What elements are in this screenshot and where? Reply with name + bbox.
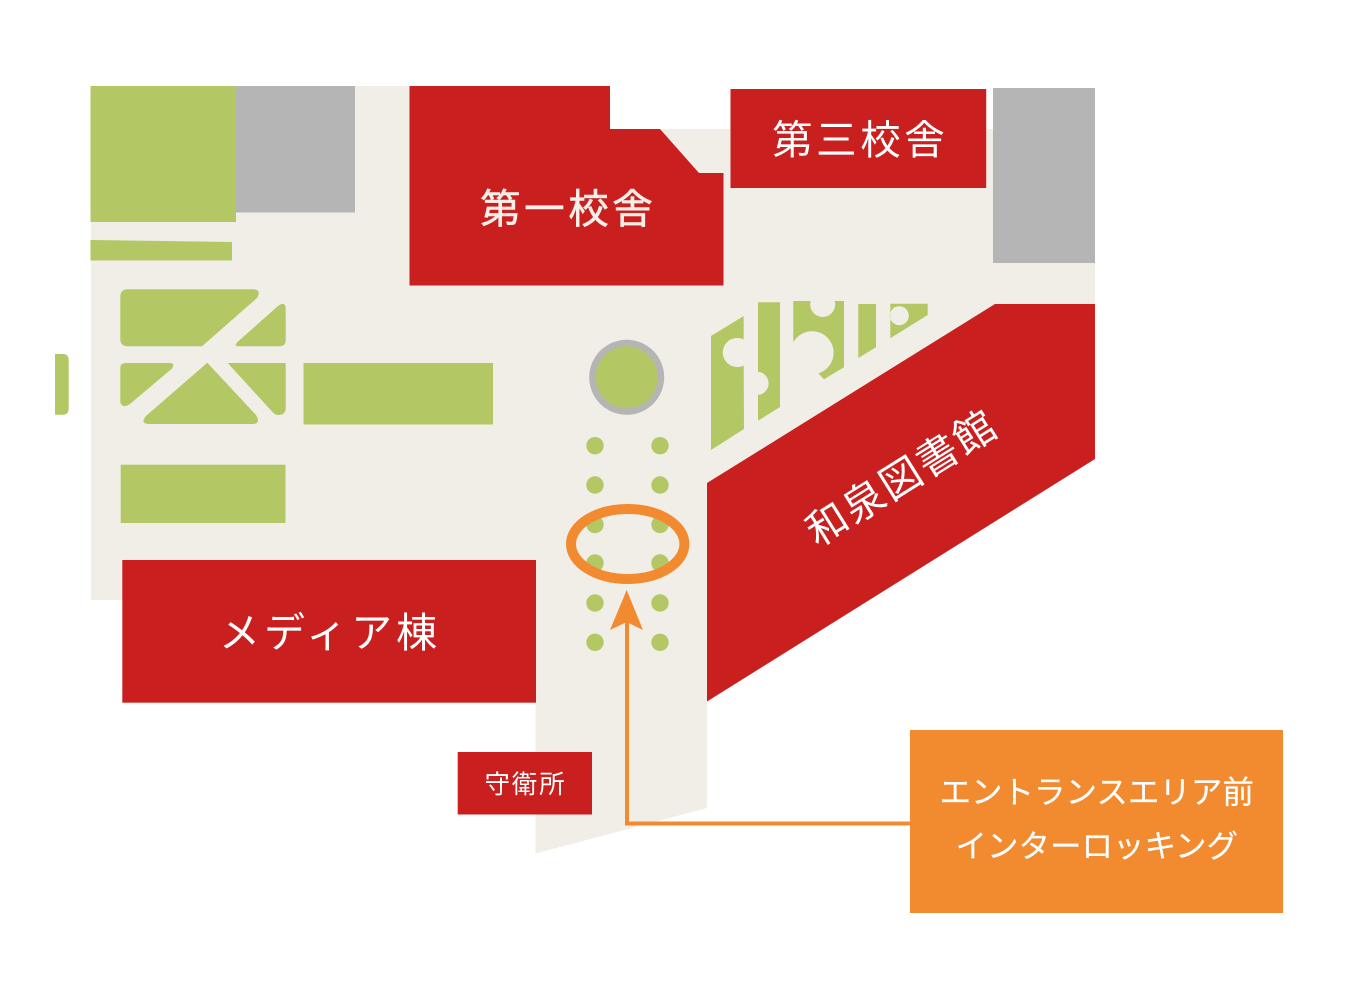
- building: 第一校舎: 第一校舎: [480, 186, 656, 232]
- building: 第三校舎: 第三校舎: [772, 117, 948, 163]
- building: 第一校舎: [410, 86, 724, 286]
- building: 和泉図書館: [707, 304, 1095, 702]
- building: メディア棟: [122, 560, 536, 703]
- building: 守衛所: 守衛所: [484, 771, 566, 799]
- building: 第三校舎: [730, 89, 986, 188]
- green area: left garden with diagonal paths: [120, 289, 286, 424]
- callout: entrance area interlocking: エントランスエリア前: [940, 774, 1254, 810]
- building: 和泉図書館: 和泉図書館: [798, 401, 1006, 555]
- green area: central rectangle: [304, 363, 493, 424]
- building: 守衛所: [458, 752, 592, 814]
- callout: entrance area interlocking: [910, 730, 1283, 913]
- fountain circle: [589, 340, 664, 415]
- green area: left edge tab: [55, 354, 69, 415]
- row of trees: [586, 437, 669, 651]
- campus ground: [91, 86, 1095, 854]
- highlight ellipse: entrance area: [571, 509, 684, 579]
- building: メディア棟: メディア棟: [219, 610, 441, 656]
- green area: lower rectangle: [121, 465, 286, 523]
- parking: top left grey area: [236, 86, 355, 212]
- green area: diagonal planting strips: [711, 301, 928, 450]
- arrow: callout to entrance area: [610, 590, 910, 824]
- parking: top right grey area: [993, 88, 1095, 263]
- callout: entrance area interlocking: インターロッキング: [956, 828, 1238, 864]
- green area: top left lawn: [90, 86, 236, 260]
